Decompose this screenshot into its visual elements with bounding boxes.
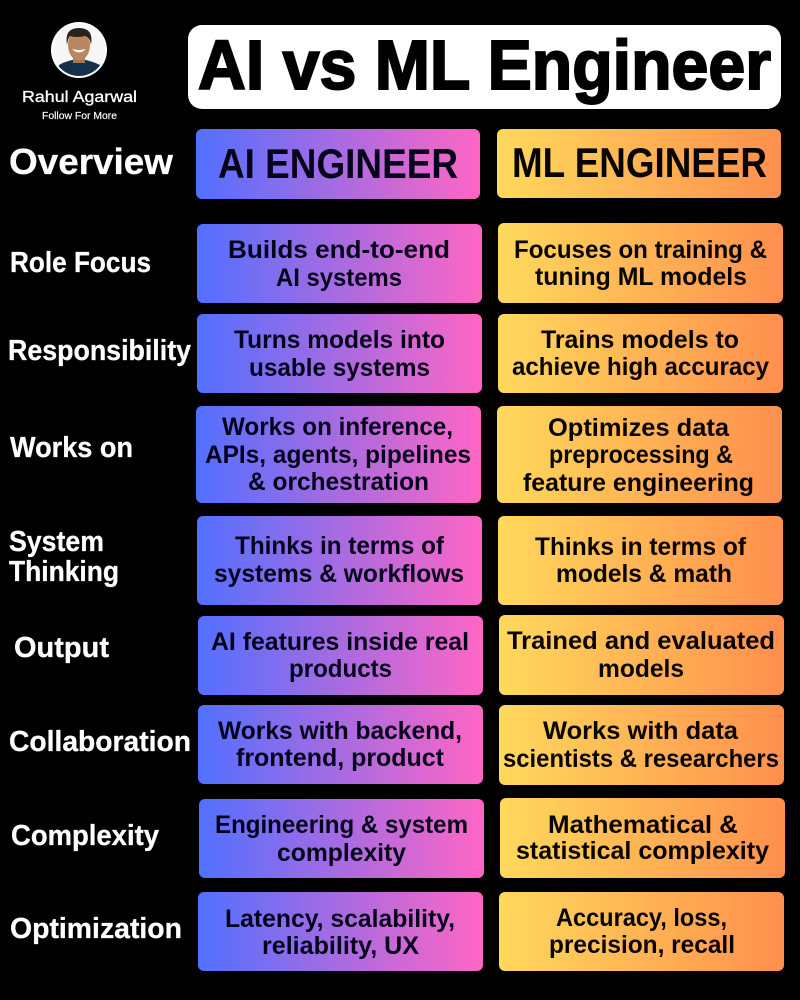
- AI card: optimization: reliability, UX: [262, 932, 419, 960]
- column header: ML Engineer: [497, 129, 781, 198]
- row label: Overview: Overview: [9, 141, 174, 182]
- AI card: collaboration: frontend, product: [236, 744, 445, 772]
- row label: System Thinking: System: [9, 526, 104, 558]
- row label: Collaboration: Collaboration: [9, 726, 191, 758]
- AI card: complexity: [199, 799, 484, 878]
- ML card: optimization: precision, recall: [549, 931, 735, 959]
- ML card: output: Trained and evaluated: [507, 627, 775, 655]
- AI card: responsibility: usable systems: [249, 354, 430, 382]
- AI card: system thinking: [197, 516, 482, 605]
- AI card: responsibility: [197, 314, 482, 393]
- AI card: role focus: AI systems: [276, 264, 402, 292]
- AI card: optimization: Latency, scalability,: [225, 905, 455, 933]
- title: AI vs ML Engineer: [198, 26, 771, 104]
- ML card: system thinking: models & math: [556, 560, 732, 588]
- ML card: works on: feature engineering: [523, 469, 754, 497]
- ML card: role focus: [498, 223, 783, 303]
- AI card: system thinking: systems & workflows: [214, 560, 464, 588]
- row label: System Thinking: [9, 526, 119, 588]
- icon: author portrait: [50, 22, 108, 78]
- AI card: collaboration: [198, 705, 483, 784]
- ML card: collaboration: Works with data: [543, 717, 739, 745]
- ML card: works on: [497, 406, 782, 503]
- AI card: collaboration: Works with backend,: [218, 717, 462, 745]
- author name: Rahul Agarwal: [22, 89, 137, 106]
- author profile: [22, 22, 137, 122]
- AI card: output: [198, 616, 483, 695]
- AI card: optimization: [198, 892, 483, 971]
- ML card: system thinking: Thinks in terms of: [535, 533, 747, 561]
- ML card: works on: Optimizes data: [548, 414, 730, 442]
- ML card: role focus: Focuses on training &: [514, 236, 767, 264]
- AI card: works on: APIs, agents, pipelines: [205, 441, 471, 469]
- ML card: works on: preprocessing &: [549, 441, 733, 469]
- row label: Role Focus: Role Focus: [10, 247, 151, 279]
- row label: Complexity: Complexity: [11, 820, 159, 852]
- AI card: role focus: Builds end-to-end: [228, 236, 450, 264]
- ML card: responsibility: [498, 314, 783, 393]
- ML card: complexity: [500, 798, 785, 878]
- ML card: output: [499, 615, 784, 695]
- follow prompt: Follow For More: [42, 111, 117, 122]
- ML card: complexity: statistical complexity: [516, 837, 769, 865]
- AI card: output: AI features inside real: [211, 628, 469, 656]
- ML card: role focus: tuning ML models: [535, 263, 747, 291]
- ML card: system thinking: [498, 516, 783, 605]
- column header: AI Engineer: AI ENGINEER: [218, 140, 458, 187]
- AI card: works on: [196, 406, 481, 503]
- ML card: collaboration: [499, 705, 784, 785]
- AI card: responsibility: Turns models into: [234, 326, 445, 354]
- ML card: output: models: [598, 655, 684, 683]
- ML card: optimization: Accuracy, loss,: [556, 904, 727, 932]
- AI card: output: products: [289, 655, 392, 683]
- AI card: complexity: Engineering & system: [215, 811, 468, 839]
- column header: AI Engineer: [196, 129, 480, 199]
- AI card: role focus: [197, 224, 482, 303]
- AI card: works on: Works on inference,: [222, 413, 453, 441]
- AI card: works on: & orchestration: [248, 468, 429, 496]
- row label: Works on: Works on: [10, 432, 133, 464]
- ML card: responsibility: achieve high accuracy: [512, 353, 769, 381]
- AI card: system thinking: Thinks in terms of: [235, 532, 445, 560]
- row label: System Thinking: Thinking: [9, 556, 119, 588]
- ML card: complexity: Mathematical &: [548, 811, 738, 839]
- ML card: collaboration: scientists & researchers: [503, 745, 779, 773]
- AI card: complexity: complexity: [277, 839, 406, 867]
- row label: Optimization: Optimization: [10, 913, 182, 945]
- row label: Responsibility: Responsibility: [8, 335, 191, 367]
- ML card: responsibility: Trains models to: [541, 326, 739, 354]
- row label: Output: Output: [14, 632, 109, 664]
- ML card: optimization: [499, 892, 784, 971]
- column header: ML Engineer: ML ENGINEER: [512, 139, 767, 186]
